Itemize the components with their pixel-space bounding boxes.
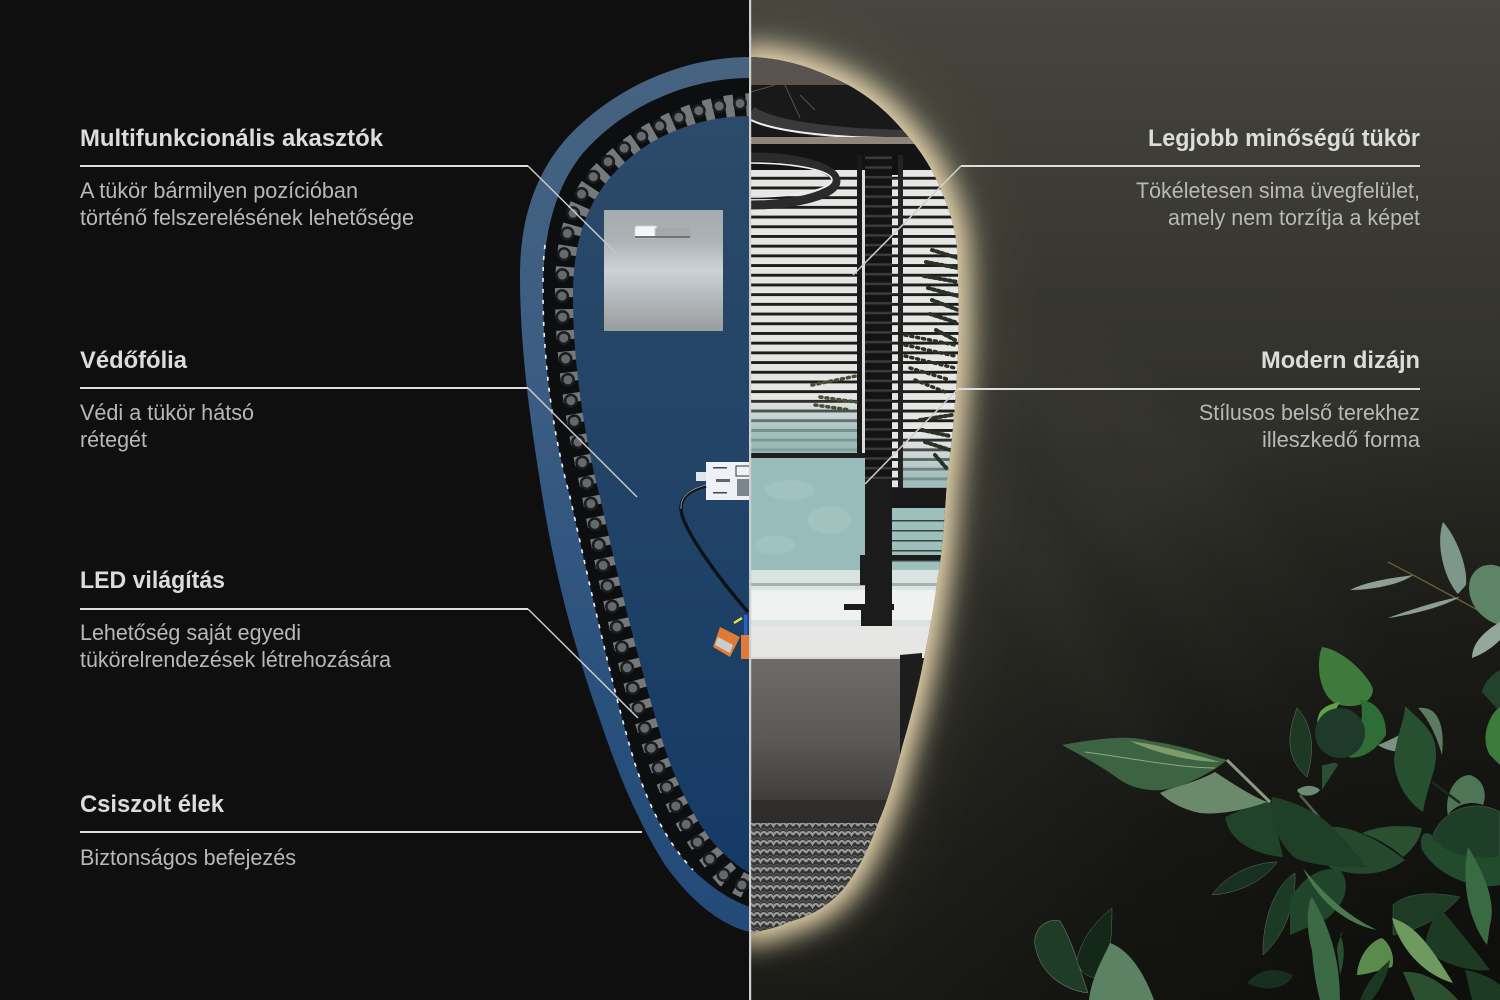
callout: Modern dizájn xyxy=(865,347,1421,484)
callout: Csiszolt élek: Biztonságos befejezés xyxy=(80,845,296,870)
teal landscape xyxy=(751,458,865,574)
callout: Multifunkcionális akasztók: történő felszerelésének lehetősége xyxy=(80,205,414,230)
callout: Modern dizájn: Stílusos belső terekhez xyxy=(1199,400,1420,425)
outer blue rim xyxy=(520,57,750,932)
leaf group: right edge xyxy=(1482,670,1500,765)
white LED dots along edge xyxy=(543,245,693,870)
pale horizon and bath surround xyxy=(751,570,941,626)
callout: Védőfólia: rétegét xyxy=(80,427,147,452)
window blinds xyxy=(751,170,857,453)
trees reflected xyxy=(812,250,958,470)
callout: LED világítás: LED világítás xyxy=(80,567,225,594)
callout: Védőfólia: Védőfólia xyxy=(80,347,188,374)
callout: Multifunkcionális akasztók: A tükör bármilyen pozícióban xyxy=(80,178,358,203)
callout: Védőfólia: Védi a tükör hátsó xyxy=(80,400,254,425)
blue back panel xyxy=(573,116,750,873)
lower ring lamp xyxy=(751,152,840,210)
callout: Modern dizájn: illeszkedő forma xyxy=(1262,427,1421,452)
callout: Multifunkcionális akasztók xyxy=(80,125,617,254)
leaf group: bottom left sprig xyxy=(1035,908,1154,1000)
callout: LED világítás: Lehetőség saját egyedi xyxy=(80,620,301,645)
ceiling band xyxy=(751,57,856,90)
callout: Legjobb minőségű tükör: amely nem torzítja a képet xyxy=(1168,205,1420,230)
upper ring lamp xyxy=(751,112,910,136)
callout: Védőfólia xyxy=(80,347,637,497)
callout: Legjobb minőségű tükör: Legjobb minőségű tükör xyxy=(1148,125,1420,152)
mirror back (left half) xyxy=(520,57,755,932)
LED strip segments xyxy=(562,103,755,890)
callout: Csiszolt élek xyxy=(80,791,642,870)
right wall background xyxy=(750,0,1500,1000)
leaf group: main branch leaves xyxy=(1062,738,1422,874)
cable xyxy=(681,486,748,612)
dark window columns xyxy=(857,155,862,455)
towel xyxy=(900,653,922,755)
black LED channel xyxy=(543,78,750,907)
bathtub xyxy=(751,658,911,800)
black marble ceiling xyxy=(751,85,914,143)
callout: LED világítás: tükörelrendezések létrehozására xyxy=(80,647,392,672)
power supply with label xyxy=(696,462,750,500)
leaf group: eucalyptus sprig xyxy=(1350,522,1500,658)
callout: Legjobb minőségű tükör: Tökéletesen sima üvegfelület, xyxy=(1136,178,1420,203)
callout: Modern dizájn: Modern dizájn xyxy=(1261,347,1420,374)
callout: Csiszolt élek: Csiszolt élek xyxy=(80,791,225,818)
plant leaves xyxy=(1035,522,1500,1000)
leaf group: mid right xyxy=(1378,706,1500,886)
leaf group: top bright cluster xyxy=(1290,647,1386,830)
left dark background xyxy=(0,0,750,1000)
floor xyxy=(751,800,887,830)
callout: Multifunkcionális akasztók: Multifunkcionális akasztók xyxy=(80,125,384,152)
faucet column xyxy=(844,480,894,626)
mirror glow halo xyxy=(750,57,958,933)
orange wire connectors xyxy=(713,615,750,659)
beige beam xyxy=(751,137,914,144)
callout: Legjobb minőségű tükör xyxy=(853,125,1420,275)
callout: LED világítás xyxy=(80,567,638,718)
leaf group: lower branch leaves xyxy=(1212,847,1500,1000)
woven rug xyxy=(751,823,881,938)
mirror reflection (bathroom scene) xyxy=(751,57,958,933)
metal hanger plate xyxy=(604,210,723,331)
centre divider xyxy=(749,0,751,1000)
